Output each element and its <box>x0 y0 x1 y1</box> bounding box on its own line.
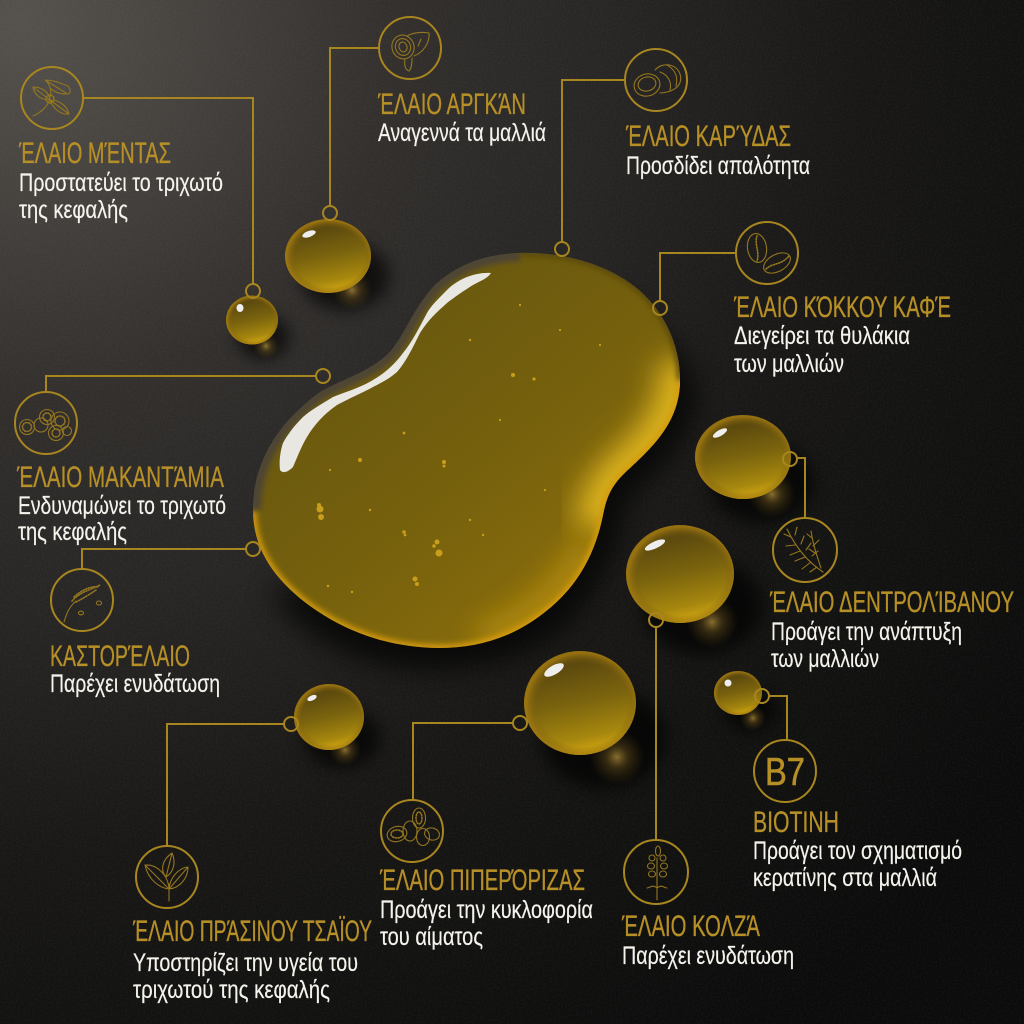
callout: biotin: κερατίνης στα μαλλιά <box>753 864 937 892</box>
callout: peppermint root oil <box>379 716 593 951</box>
callout: coconut oil <box>555 49 810 256</box>
icon: argan nut <box>379 17 441 79</box>
callout: rosemary oil: των μαλλιών <box>771 645 879 673</box>
callout: green tea oil <box>132 717 372 1004</box>
callout: castor oil <box>50 542 260 698</box>
callout: rapeseed oil: Παρέχει ενυδάτωση <box>622 942 794 970</box>
droplet: biotin <box>714 671 776 731</box>
highlight on pool <box>280 273 491 472</box>
droplet: green tea <box>294 684 380 768</box>
callout: castor oil: ΚΑΣΤΟΡΈΛΑΙΟ <box>50 640 190 673</box>
callout: biotin: ΒΙΟΤΙΝΗ <box>753 806 839 839</box>
callout: argan oil: ΈΛΑΙΟ ΑΡΓΚΆΝ <box>377 88 526 121</box>
callout: mint oil: ΈΛΑΙΟ ΜΈΝΤΑΣ <box>18 137 171 170</box>
callout: peppermint root oil: ΈΛΑΙΟ ΠΙΠΕΡΌΡΙΖΑΣ <box>379 864 585 897</box>
icon: rosemary sprig <box>773 518 837 582</box>
callout: peppermint root oil: Προάγει την κυκλοφορία <box>380 896 593 924</box>
icon: rapeseed plant <box>624 840 688 904</box>
callout: coffee bean oil <box>653 222 951 378</box>
callout: argan oil: Αναγεννά τα μαλλιά <box>378 119 546 147</box>
callout: green tea oil: Υποστηρίζει την υγεία του <box>133 949 358 977</box>
callout: coffee bean oil: των μαλλιών <box>734 350 844 378</box>
callout: macadamia oil <box>15 369 330 546</box>
callout: coconut oil: Προσδίδει απαλότητα <box>626 152 810 180</box>
callout: macadamia oil: ΈΛΑΙΟ ΜΑΚΑΝΤΆΜΙΑ <box>16 461 224 494</box>
callout: rosemary oil <box>769 452 1014 673</box>
icon: castor flower <box>51 569 113 631</box>
callout: macadamia oil: Ενδυναμώνει το τριχωτό <box>18 492 226 520</box>
callout: rapeseed oil <box>621 613 794 970</box>
callout: macadamia oil: της κεφαλής <box>18 518 127 546</box>
callout: coconut oil: ΈΛΑΙΟ ΚΑΡΎΔΑΣ <box>625 120 791 153</box>
callout: coffee bean oil: Διεγείρει τα θυλάκια <box>734 322 910 350</box>
droplet: rapeseed <box>626 525 762 654</box>
icon: pepper root <box>381 800 443 862</box>
callout: green tea oil: τριχωτού της κεφαλής <box>133 976 330 1004</box>
droplet: rosemary <box>695 415 814 523</box>
callout: castor oil: Παρέχει ενυδάτωση <box>50 670 220 698</box>
icon: B7 badge <box>754 740 816 802</box>
callout: mint oil: Προστατεύει το τριχωτό <box>19 169 223 197</box>
icon: B7 badge: B7 <box>765 751 805 794</box>
droplet: argan <box>285 219 389 310</box>
icon: coconut <box>625 49 687 111</box>
icon: tea leaves <box>136 846 198 908</box>
droplets <box>226 219 814 788</box>
icon: coffee beans <box>736 222 798 284</box>
callout: biotin <box>753 689 962 892</box>
icon: mint leaves <box>21 67 83 129</box>
droplet: mint <box>226 296 289 359</box>
callout: mint oil: της κεφαλής <box>19 196 128 224</box>
callout: argan oil <box>323 17 546 220</box>
callout: rosemary oil: Προάγει την ανάπτυξη <box>771 618 962 646</box>
callout: mint oil <box>18 67 260 298</box>
callout: green tea oil: ΈΛΑΙΟ ΠΡΆΣΙΝΟΥ ΤΣΑΪΟΥ <box>132 915 372 948</box>
icon: macadamia nuts <box>15 392 77 454</box>
central oil pool <box>253 253 696 669</box>
callout: biotin: Προάγει τον σχηματισμό <box>753 837 962 865</box>
callout: peppermint root oil: του αίματος <box>380 923 483 951</box>
callout: rapeseed oil: ΈΛΑΙΟ ΚΟΛΖΆ <box>621 910 760 943</box>
droplet: ginger root <box>524 651 666 788</box>
bubbles and specks <box>316 304 601 593</box>
